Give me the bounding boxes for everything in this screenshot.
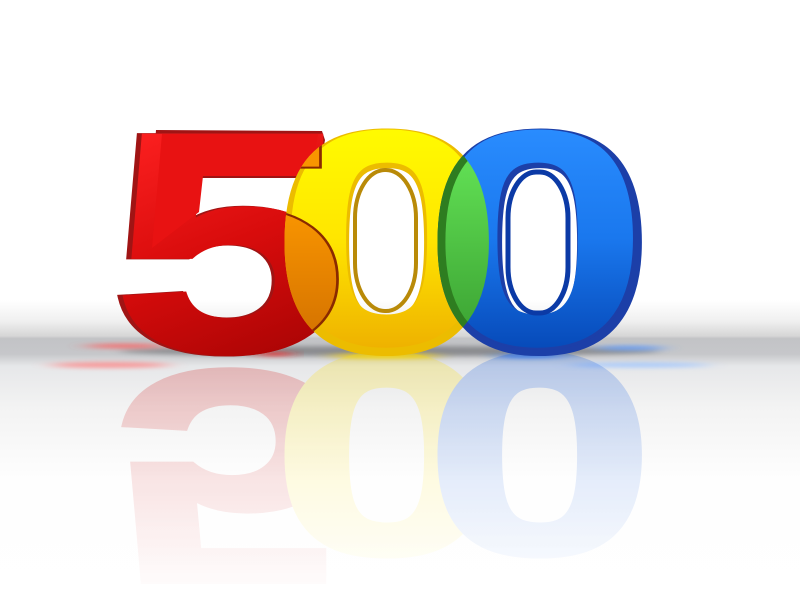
ground shadow and coloured light glows — [50, 344, 710, 368]
overlap: green where yellow 0 meets blue 0: 0 — [425, 66, 655, 417]
digit 0, blue: 0 — [425, 66, 655, 417]
numeral 500 — [117, 128, 642, 356]
dark inner wall of blue zero — [508, 172, 568, 313]
digit 0, yellow: 0 — [275, 67, 499, 411]
overlap: orange where 5 meets yellow 0: 5 — [113, 69, 349, 418]
digit 5, red: 5 — [113, 69, 349, 418]
digit 0, blue: 0 — [427, 65, 649, 410]
digit 0, yellow: 0 — [272, 66, 502, 417]
gold inner rim of yellow zero — [355, 170, 416, 311]
reflection of the 500 on the floor — [121, 354, 642, 561]
digit 5, red: 5 — [108, 68, 348, 417]
